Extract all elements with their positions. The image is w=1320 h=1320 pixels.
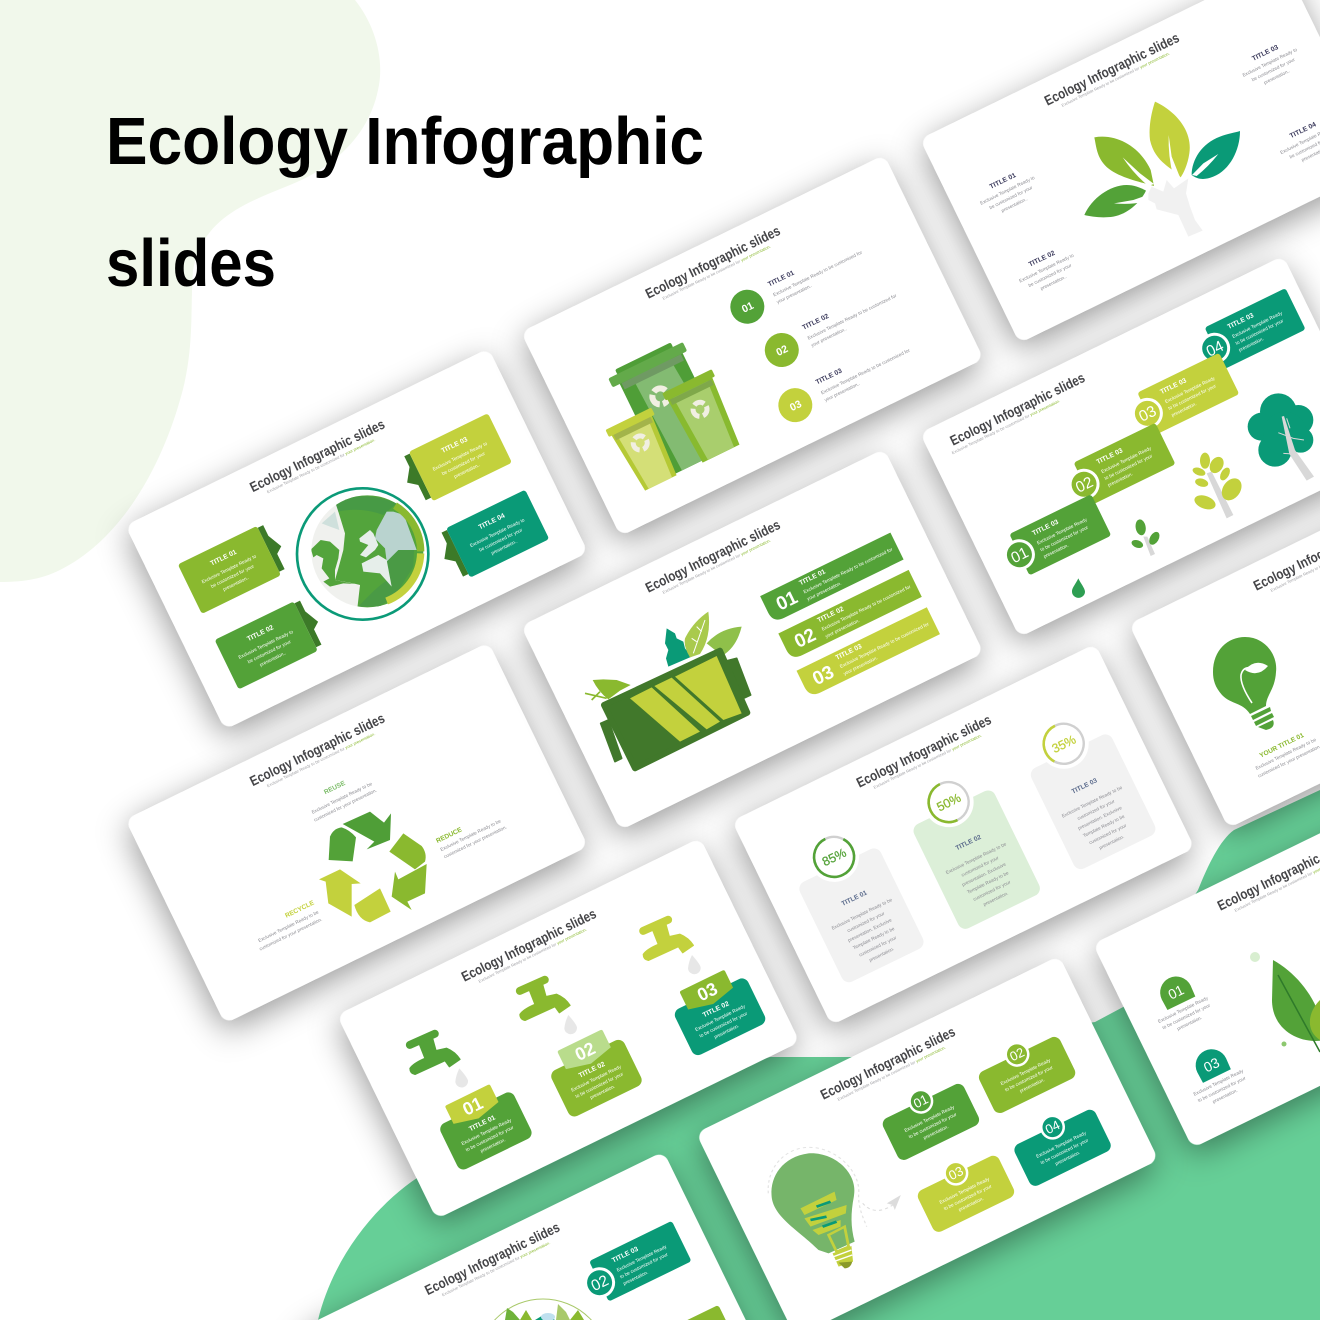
- text block 04: [1275, 114, 1320, 169]
- bar 01: TITLE 01: [798, 568, 827, 587]
- box 04: Exclusive Template Ready: [1035, 1130, 1087, 1159]
- step 04: Exclusive Template Ready: [1231, 310, 1283, 339]
- list item 03: your presentation..: [824, 381, 861, 403]
- box 02: 02: [1007, 1044, 1027, 1064]
- slide: recycle: Exclusive Template Ready to be: [440, 818, 502, 852]
- box 02: presentation.: [1019, 1077, 1045, 1094]
- slide: bulb: Ecology Infographic slides: [818, 1023, 958, 1103]
- slide: hand tree: Exclusive Template Ready to be customized for your presentation.: [1061, 51, 1171, 108]
- step box 02: TITLE 03: [611, 1246, 640, 1265]
- card 35%: customized for your: [1088, 823, 1128, 845]
- slide: leaves: [1093, 767, 1320, 1148]
- list item 02: [759, 279, 904, 373]
- card 01: 01: [459, 1093, 486, 1120]
- icon: leaves: [1250, 952, 1320, 1052]
- slide: recycle: [125, 642, 588, 1024]
- step 04: presentation.: [1238, 336, 1264, 353]
- box 02: Exclusive Template Ready: [1000, 1057, 1052, 1086]
- list item 02: your presentation..: [810, 326, 847, 348]
- slide: bulb: Exclusive Template Ready to be customized for your presentation.: [837, 1045, 947, 1102]
- slide: globe: [125, 348, 588, 730]
- icon: globe: [297, 488, 428, 620]
- card 01: presentation.: [480, 1137, 506, 1154]
- slide: recycle: REDUCE: [435, 826, 464, 845]
- slide: globe: presentation..: [222, 575, 250, 592]
- step box 02: Exclusive Template Ready: [616, 1244, 668, 1273]
- icon: right bin: [662, 369, 747, 465]
- text block 03: Exclusive Template Ready to: [1242, 47, 1298, 78]
- bar 03: [797, 607, 940, 698]
- card 85%: 85%: [820, 846, 849, 869]
- bar 02: Exclusive Template Ready to be customized for: [821, 584, 912, 632]
- slide: bins: Exclusive Template Ready to be customized for your presentation.: [662, 244, 772, 301]
- card 50%: customized for your: [972, 879, 1012, 902]
- step 04: [1191, 288, 1306, 376]
- card 35%: TITLE 03: [1071, 777, 1099, 796]
- bar 01: 01: [773, 587, 802, 615]
- list item 01: TITLE 01: [767, 270, 796, 288]
- text block 02: TITLE 02: [1028, 250, 1056, 269]
- card 85%: Template Ready to be: [852, 926, 896, 950]
- slide: percentages: [732, 644, 1195, 1025]
- item 01: [1143, 966, 1216, 1037]
- step 04: TITLE 03: [1227, 312, 1255, 331]
- text block 01: [974, 165, 1043, 220]
- item 03: to be customized for your: [1197, 1075, 1247, 1103]
- box 02: to be customized for your: [1004, 1065, 1054, 1092]
- slide: recycle: customized for your presentation.: [443, 824, 508, 859]
- card 50%: Template Ready to be: [966, 870, 1010, 895]
- step box 02: presentation.: [622, 1270, 649, 1286]
- card 35%: customized for your: [1076, 798, 1116, 821]
- card 35%: presentation.: [1098, 834, 1125, 850]
- slide: recycle: Ecology Infographic slides: [247, 710, 387, 789]
- list item 01: your presentation..: [776, 283, 813, 305]
- card 03: 03: [694, 978, 721, 1005]
- slide: hand tree: Ecology Infographic slides: [1042, 29, 1182, 109]
- card 50%: TITLE 02: [955, 834, 983, 852]
- slide: solo bulb: customized for your presentation.: [1257, 744, 1320, 779]
- slide: hand tree: [920, 0, 1320, 343]
- slide: globe: be customized for your: [441, 451, 486, 476]
- card 02: TITLE 02: [578, 1061, 607, 1080]
- slide: globe: presentation..: [453, 462, 481, 479]
- card 01: Exclusive Template Ready: [461, 1117, 513, 1146]
- box 01: Exclusive Template Ready: [904, 1104, 956, 1133]
- card 35%: Exclusive Template Ready to be: [1061, 785, 1123, 819]
- slide: globe: Exclusive Template Ready to be customized for your presentation.: [266, 437, 376, 494]
- box 03: presentation.: [958, 1196, 984, 1212]
- list item 02: Exclusive Template Ready to be customized for: [807, 293, 898, 341]
- card 85%: presentation.: [868, 946, 895, 963]
- icons: faucets: [405, 915, 701, 1088]
- slide: steps: Ecology Infographic slides: [947, 369, 1087, 449]
- step 03: 03: [1136, 403, 1159, 426]
- bar 02: 02: [791, 625, 819, 653]
- step 02: [1060, 423, 1176, 511]
- slide: faucets: [337, 838, 800, 1219]
- card 50%: [897, 760, 1043, 931]
- card 02: presentation.: [589, 1084, 616, 1100]
- icon: battery with leaves: [585, 612, 751, 768]
- step 03: [1123, 353, 1239, 441]
- card 35%: 35%: [1050, 732, 1078, 756]
- card 02: [542, 1023, 644, 1119]
- slide: bins: [521, 155, 984, 536]
- text block 03: presentation..: [1263, 68, 1291, 85]
- slide: recycle: Exclusive Template Ready to be: [257, 909, 320, 943]
- slide: globe: Ecology Infographic slides: [247, 416, 387, 495]
- box 02: [971, 1023, 1078, 1115]
- bar 02: your presentation.: [824, 618, 860, 639]
- text block 02: Exclusive Template Ready to: [1018, 253, 1075, 284]
- slide: battery: Exclusive Template Ready to be customized for your presentation.: [662, 538, 772, 595]
- slide: globe: be customized for your: [478, 527, 524, 553]
- list item 01: 01: [740, 300, 756, 316]
- step 01: Exclusive Template Ready: [1036, 517, 1088, 546]
- step 01: to be customized for your: [1039, 525, 1089, 552]
- list item 03: [773, 334, 917, 428]
- card 50%: presentation. Exclusive: [961, 861, 1007, 887]
- box 03: 03: [946, 1163, 966, 1183]
- slide: percentages: Exclusive Template Ready to be customized for your presentation.: [873, 733, 983, 790]
- card 01: to be customized for your: [465, 1125, 515, 1152]
- slide: globe: be customized for your: [247, 639, 292, 664]
- item 01: to be customized for your: [1161, 1003, 1211, 1030]
- box 04: to be customized for your: [1040, 1137, 1089, 1165]
- item 01: 01: [1165, 981, 1187, 1003]
- slide: solo bulb: YOUR TITLE 01: [1259, 732, 1305, 760]
- card 50%: Exclusive Template Ready to be: [945, 841, 1007, 875]
- icon: hand with leaves: [1084, 102, 1240, 237]
- slide: battery: Ecology Infographic slides: [643, 516, 783, 596]
- card 02: to be customized for your: [575, 1071, 624, 1099]
- list item 01: Exclusive Template Ready to be customized for: [772, 250, 863, 297]
- slide: globe: Exclusive Template Ready to: [432, 441, 488, 472]
- box 04: 04: [1043, 1117, 1062, 1137]
- card 03: TITLE 02: [702, 1000, 731, 1019]
- item 03: Exclusive Template Ready: [1193, 1068, 1245, 1097]
- slide: steps: Exclusive Template Ready to be customized for your presentation.: [951, 398, 1061, 455]
- slide: earth plants: Ecology Infographic slides: [422, 1219, 562, 1298]
- step box lower: [637, 1305, 738, 1320]
- box 03: [910, 1142, 1017, 1234]
- slide: recycle: Exclusive Template Ready to be: [311, 781, 373, 815]
- slide: earth plants: Exclusive Template Ready to be customized for your presentation.: [441, 1240, 551, 1297]
- green background shape: [318, 790, 1320, 1320]
- card 85%: customized for your: [858, 935, 898, 958]
- card 85%: [782, 815, 926, 985]
- card 02: Exclusive Template Ready: [570, 1064, 622, 1093]
- slide: recycle: RECYCLE: [284, 899, 316, 920]
- step 02: TITLE 03: [1095, 447, 1124, 466]
- bar 02: [778, 570, 922, 660]
- icon: green bulb: [1213, 637, 1276, 730]
- box 04: presentation.: [1054, 1150, 1081, 1166]
- step 01: 01: [1008, 544, 1031, 567]
- step box 02: 02: [589, 1272, 612, 1295]
- slide: recycle: REUSE: [323, 780, 347, 796]
- text block 02: [1013, 243, 1082, 298]
- step 04: 04: [1204, 338, 1227, 361]
- step 03: presentation.: [1171, 401, 1197, 418]
- main title: Ecology Infographic: [106, 104, 704, 179]
- icon: left bin: [605, 408, 683, 495]
- card 03: [666, 963, 768, 1057]
- card 50%: customized for your: [961, 855, 1000, 878]
- slide: globe: presentation..: [259, 650, 287, 667]
- text block 02: presentation..: [1040, 274, 1067, 291]
- text block 01: Exclusive Template Ready to: [979, 175, 1036, 206]
- card 01: [431, 1077, 534, 1172]
- box 01: 01: [911, 1091, 931, 1111]
- list item 02: 02: [774, 343, 790, 359]
- card 03: to be customized for your: [699, 1011, 748, 1038]
- slide: globe: TITLE 02: [246, 624, 275, 643]
- item 03: presentation.: [1212, 1088, 1238, 1104]
- box 03: to be customized for your: [943, 1183, 993, 1211]
- bar 02: TITLE 02: [816, 606, 845, 624]
- icon: recycle arrows: [319, 812, 427, 922]
- list item 03: 03: [788, 398, 804, 414]
- card 35%: presentation. Exclusive: [1077, 805, 1123, 831]
- icon: globe with plants: [477, 1299, 609, 1320]
- card 50%: 50%: [935, 791, 963, 814]
- card 02: 02: [572, 1038, 598, 1065]
- list item 02: TITLE 02: [801, 313, 830, 332]
- text block 01: TITLE 01: [989, 172, 1017, 191]
- slide: recycle: customized for your presentation.: [258, 917, 323, 952]
- slide: globe: TITLE 03: [440, 436, 469, 455]
- box 01: presentation.: [923, 1124, 949, 1140]
- slide: globe: presentation..: [490, 539, 518, 556]
- bar 01: your presentation.: [806, 581, 842, 602]
- slide: globe: be customized for your: [210, 563, 255, 589]
- icon: large bin: [606, 338, 733, 482]
- step 03: TITLE 03: [1159, 377, 1188, 396]
- step 02: presentation.: [1107, 471, 1133, 488]
- bar 03: TITLE 03: [835, 643, 863, 662]
- list item 03: Exclusive Template Ready to be customized for: [820, 348, 911, 395]
- item 01: presentation.: [1176, 1015, 1203, 1031]
- slide: battery: [521, 449, 984, 830]
- box 01: to be customized for your: [908, 1112, 958, 1139]
- slide: globe: Exclusive Template Ready to: [469, 517, 526, 548]
- slide: globe: TITLE 04: [478, 513, 506, 531]
- slide: recycle: Exclusive Template Ready to be customized for your presentation.: [266, 731, 376, 788]
- step 01: presentation.: [1043, 543, 1069, 559]
- step box 02: [575, 1221, 691, 1308]
- bar 01: [760, 533, 904, 623]
- bar 01: Exclusive Template Ready to be customized for: [803, 547, 894, 594]
- card 35%: [1013, 701, 1158, 872]
- slide: bulb: [696, 956, 1159, 1320]
- card 85%: customized for your: [846, 911, 886, 933]
- card 85%: presentation. Exclusive: [847, 917, 893, 943]
- slide: steps: [920, 256, 1320, 637]
- bar 03: your presentation.: [843, 655, 878, 676]
- slide: percentages: Ecology Infographic slides: [854, 711, 994, 791]
- card 03: Exclusive Template Ready: [694, 1003, 746, 1032]
- pale green blob: [0, 0, 380, 582]
- card 85%: Exclusive Template Ready to be: [831, 897, 893, 931]
- list item 03: TITLE 03: [815, 368, 844, 386]
- main title: [106, 104, 704, 301]
- slide: faucets: Ecology Infographic slides: [459, 905, 599, 985]
- slide: solo bulb: Exclusive Template Ready to be: [1255, 737, 1317, 771]
- item 03: 03: [1201, 1054, 1222, 1075]
- step 02: to be customized for your: [1104, 453, 1153, 481]
- step 02: Exclusive Template Ready: [1100, 445, 1152, 474]
- slide: solo bulb: [1129, 447, 1320, 828]
- card 35%: Template Ready to be: [1082, 814, 1126, 838]
- main title: slides: [106, 226, 276, 301]
- card 03: presentation.: [713, 1023, 740, 1040]
- bar 03: Exclusive Template Ready to be customized for: [839, 621, 930, 669]
- slide: globe: Exclusive Template Ready to: [238, 629, 294, 660]
- slide: faucets: Exclusive Template Ready to be customized for your presentation.: [478, 927, 588, 984]
- text block 01: presentation..: [1001, 196, 1028, 213]
- box 04: [1007, 1096, 1113, 1188]
- box 03: Exclusive Template Ready: [939, 1176, 991, 1205]
- step 02: 02: [1073, 474, 1096, 497]
- slide: globe: Exclusive Template Ready to: [201, 553, 257, 584]
- list item 01: [725, 236, 869, 329]
- step 03: to be customized for your: [1167, 383, 1217, 411]
- item 01: Exclusive Template Ready: [1157, 995, 1209, 1024]
- slide: earth plants: [300, 1151, 763, 1320]
- text block 02: be customized for your: [1028, 263, 1073, 288]
- step 03: Exclusive Template Ready: [1164, 375, 1216, 404]
- card 01: TITLE 01: [468, 1114, 497, 1133]
- card 85%: TITLE 01: [841, 889, 869, 908]
- text block 03: TITLE 03: [1251, 44, 1280, 63]
- text block 03: be customized for your: [1251, 57, 1296, 82]
- text block 01: be customized for your: [988, 185, 1034, 210]
- text block 04: TITLE 04: [1289, 121, 1318, 140]
- icons: growth stages: [1072, 393, 1314, 598]
- step 01: [995, 494, 1111, 582]
- step box 02: to be customized for your: [619, 1252, 669, 1279]
- step 04: to be customized for your: [1235, 318, 1285, 346]
- text block 03: [1237, 37, 1305, 92]
- icon: bulb with coil and paper plane: [768, 1147, 901, 1268]
- item 03: [1179, 1039, 1251, 1110]
- box 01: [875, 1070, 981, 1162]
- step 01: TITLE 03: [1031, 519, 1060, 537]
- slide: bins: Ecology Infographic slides: [643, 222, 783, 302]
- slide: globe: TITLE 01: [209, 549, 238, 568]
- slide: recycle: customized for your presentation.: [313, 788, 378, 823]
- card 50%: presentation.: [982, 891, 1009, 907]
- bar 03: 03: [809, 662, 838, 690]
